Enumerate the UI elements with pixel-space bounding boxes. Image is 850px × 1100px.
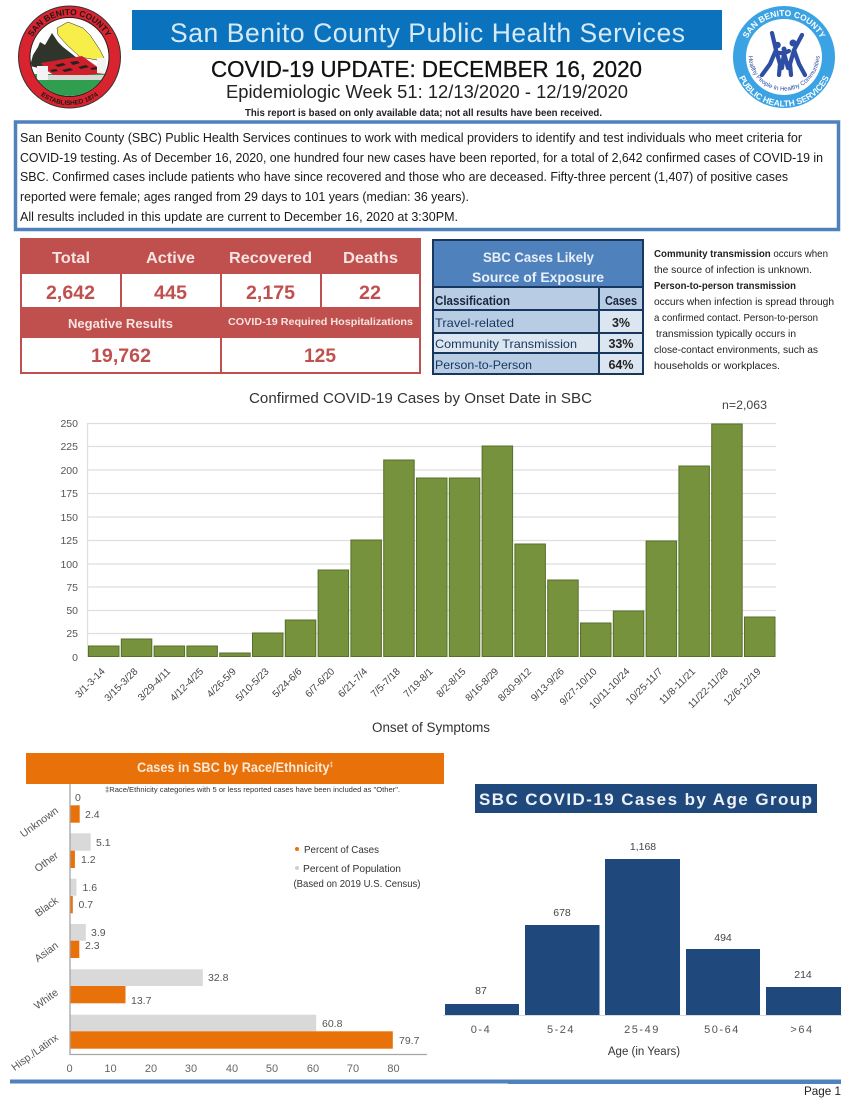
bar chart: age group: 25-49 [624, 1024, 660, 1036]
panel: intro text: COVID-19 testing. As of December 16, 2020, one hundred four new cases have been reported, for a total of 2,642 confirmed cases of COVID-19 in [20, 151, 823, 165]
bar chart: race and ethnicity [9, 784, 427, 1075]
text block: transmission definitions [654, 249, 834, 372]
bar chart: cases by onset date: 3/15-3/28 [103, 666, 141, 704]
panel: intro text: SBC. Confirmed cases include patients who have since recovered and those who are deceased. Fifty-three percent (1,407) of positive cases [20, 170, 788, 184]
bar chart: race and ethnicity: 1.2 [81, 854, 96, 866]
text block: transmission definitions: the source of infection is unknown. [654, 265, 812, 276]
bar chart: race and ethnicity: Hisp./Latinx [9, 1031, 61, 1074]
logo: San Benito County seal: ESTABLISHED 1874 [41, 92, 98, 105]
panel header: race and ethnicity: Cases in SBC by Race/Ethnicity [137, 759, 349, 775]
bar chart: cases by onset date: 5/24-6/6 [271, 666, 305, 700]
panel header: age group [475, 784, 817, 813]
bar chart: cases by onset date: 225 [60, 441, 78, 453]
panel: likely source of exposure table: Travel-related [435, 316, 514, 330]
bar chart: cases by onset date: 9/13-9/26 [529, 666, 567, 704]
panel: likely source of exposure table: Person-to-Person [435, 358, 532, 372]
bar chart: race and ethnicity: 79.7 [399, 1035, 420, 1047]
bar chart: race and ethnicity: Asian [32, 940, 61, 965]
bar chart: race and ethnicity: 80 [387, 1063, 400, 1075]
panel: case totals table: 19,762 [91, 346, 151, 367]
panel: likely source of exposure table: Community Transmission [435, 337, 577, 351]
bar chart: race and ethnicity: 40 [226, 1063, 238, 1075]
chart title: cases by onset date: Confirmed COVID-19 Cases by Onset Date in SBC [249, 391, 592, 407]
panel: case totals table: Deaths [343, 250, 398, 267]
panel: likely source of exposure table: Classification [435, 294, 510, 308]
bar chart: cases by onset date: 25 [66, 628, 78, 640]
logo: Public Health Services [733, 6, 835, 108]
bar chart: age group: 1,168 [630, 841, 656, 853]
panel: case totals table: 125 [304, 346, 336, 367]
panel header: race and ethnicity [26, 753, 444, 784]
panel: likely source of exposure table [432, 239, 644, 375]
chart note: sample size: n=2,063 [722, 400, 767, 412]
text block: transmission definitions: households or workplaces. [654, 361, 780, 372]
bar chart: cases by onset date: 4/26-5/9 [205, 666, 239, 700]
bar chart: race and ethnicity: Unknown [18, 805, 61, 840]
panel: likely source of exposure table: SBC Cases Likely [483, 249, 594, 265]
logo: San Benito County seal [18, 6, 121, 108]
logo: Public Health Services: PUBLIC HEALTH SERVICES [739, 75, 828, 107]
bar chart: cases by onset date: 250 [60, 418, 78, 430]
page number: Page 1 [804, 1084, 841, 1098]
panel: likely source of exposure table: Source of Exposure [472, 269, 604, 285]
axis title: onset of symptoms: Onset of Symptoms [372, 720, 490, 735]
bar chart: cases by onset date: 100 [60, 559, 78, 571]
bar chart: cases by onset date: 9/27-10/10 [558, 666, 600, 708]
panel: case totals table: 445 [154, 283, 187, 304]
logo: Public Health Services: SAN BENITO COUNTY [743, 10, 826, 38]
bar chart: cases by onset date: 3/1-3-14 [74, 666, 108, 700]
bar chart: race and ethnicity: 2.3 [85, 940, 100, 952]
bar chart: race and ethnicity: 0 [66, 1063, 73, 1075]
bar chart: cases by onset date: 4/12-4/25 [168, 666, 206, 704]
bar chart: cases by onset date: 11/22-11/28 [686, 666, 731, 711]
bar chart: cases by onset date: 7/19-8/1 [402, 666, 436, 700]
panel: case totals table: 2,175 [246, 283, 295, 304]
heading: epidemiologic week: Epidemiologic Week 51: 12/13/2020 - 12/19/2020 [226, 81, 628, 102]
bar chart: age group [443, 841, 842, 1036]
logo: San Benito County seal: SAN BENITO COUNTY [28, 9, 112, 36]
panel: case totals table: 2,642 [46, 283, 95, 304]
bar chart: cases by onset date: 200 [60, 465, 78, 477]
panel: intro text [16, 122, 838, 230]
bar chart: cases by onset date: 12/6-12/19 [722, 666, 764, 708]
bar chart: cases by onset date: 6/7-6/20 [303, 666, 338, 700]
bar chart: age group: >64 [790, 1024, 814, 1036]
text block: transmission definitions: transmission typically occurs in [656, 329, 796, 340]
panel: likely source of exposure table: 33% [608, 337, 634, 351]
panel header: race and ethnicity: ‡ [329, 762, 333, 769]
bar chart: race and ethnicity: 30 [185, 1063, 197, 1075]
bar chart: race and ethnicity: 60 [307, 1063, 319, 1075]
bar chart: race and ethnicity: 70 [347, 1063, 359, 1075]
legend: race chart: Percent of Population [303, 864, 401, 875]
bar chart: cases by onset date: 150 [60, 512, 78, 524]
bar chart: cases by onset date: 11/8-11/21 [657, 666, 698, 707]
bar chart: race and ethnicity: 10 [104, 1063, 117, 1075]
footer rule [10, 1080, 841, 1084]
bar chart: cases by onset date: 8/30-9/12 [496, 666, 534, 704]
bar chart: cases by onset date: 10/25-11/7 [624, 666, 666, 707]
bar chart: cases by onset date: 5/10-5/23 [234, 666, 272, 704]
bar chart: cases by onset date: 6/21-7/4 [336, 666, 370, 700]
bar chart: race and ethnicity: 50 [266, 1063, 278, 1075]
bar chart: cases by onset date: 8/2-8/15 [435, 666, 469, 700]
panel: likely source of exposure table: 64% [608, 358, 634, 372]
bar chart: race and ethnicity: 1.6 [82, 882, 97, 894]
text block: transmission definitions: a confirmed contact. Person-to-person [654, 313, 818, 324]
bar chart: race and ethnicity: 13.7 [131, 995, 152, 1007]
bar chart: cases by onset date: 7/5-7/18 [369, 666, 403, 700]
bar chart: race and ethnicity: 2.4 [85, 809, 100, 821]
bar chart: cases by onset date [60, 418, 776, 711]
bar chart: cases by onset date: 10/11-10/24 [587, 666, 633, 711]
bar chart: race and ethnicity: 0 [75, 792, 81, 804]
bar chart: race and ethnicity: 3.9 [91, 927, 106, 939]
bar chart: race and ethnicity: Black [33, 894, 61, 920]
bar chart: age group: 0-4 [471, 1024, 491, 1036]
report note: This report is based on only available data; not all results have been received. [245, 108, 602, 119]
panel: case totals table: Negative Results [68, 317, 173, 331]
panel: likely source of exposure table: 3% [612, 316, 630, 330]
axis title: age in years: Age (in Years) [608, 1046, 680, 1058]
panel: case totals table: COVID-19 Required Hospitalizations [228, 316, 413, 328]
bar chart: cases by onset date: 0 [72, 652, 78, 664]
bar chart: race and ethnicity: 32.8 [208, 972, 229, 984]
title banner: San Benito County Public Health Services [170, 18, 685, 48]
panel header: age group: SBC COVID-19 Cases by Age Group [479, 790, 812, 809]
panel: case totals table: 22 [359, 283, 381, 304]
legend: race chart [294, 845, 420, 890]
title banner [132, 10, 722, 50]
bar chart: age group: 87 [475, 985, 487, 997]
panel: case totals table: Active [146, 250, 195, 267]
bar chart: race and ethnicity: 5.1 [96, 837, 111, 849]
bar chart: race and ethnicity: 0.7 [78, 899, 93, 911]
legend: race chart: Percent of Cases [304, 845, 379, 856]
text block: transmission definitions: Community transmission occurs when [654, 249, 828, 260]
bar chart: cases by onset date: 50 [66, 605, 78, 617]
bar chart: cases by onset date: 8/16-8/29 [464, 666, 502, 704]
bar chart: cases by onset date: 175 [60, 488, 78, 500]
panel: case totals table [20, 238, 421, 374]
logo: Public Health Services: Healthy People In Healthy Communities [748, 56, 820, 91]
text block: transmission definitions: close-contact environments, such as [654, 345, 818, 356]
text block: transmission definitions: Person-to-person transmission [654, 281, 796, 292]
bar chart: cases by onset date: 125 [60, 535, 78, 547]
panel: case totals table: Total [52, 250, 90, 267]
panel: case totals table: Recovered [229, 250, 312, 267]
bar chart: race and ethnicity: White [32, 987, 61, 1012]
bar chart: age group: 214 [794, 969, 812, 981]
heading: update date: COVID-19 UPDATE: DECEMBER 16, 2020 [211, 56, 642, 82]
panel: intro text: All results included in this update are current to December 16, 2020 at 3:30PM. [20, 210, 458, 224]
bar chart: race and ethnicity: Other [32, 849, 61, 875]
bar chart: age group: 50-64 [704, 1024, 740, 1036]
panel: likely source of exposure table: Cases [605, 294, 637, 308]
panel: intro text: reported were female; ages ranged from 29 days to 101 years (median: 36 years). [20, 190, 469, 204]
text block: transmission definitions: occurs when infection is spread through [654, 297, 834, 308]
legend: race chart: (Based on 2019 U.S. Census) [294, 879, 420, 890]
footnote: race categories: ‡Race/Ethnicity categories with 5 or less reported cases have been included as "Other". [105, 785, 400, 794]
bar chart: cases by onset date: 3/29-4/11 [136, 666, 174, 703]
bar chart: age group: 678 [553, 907, 571, 919]
bar chart: race and ethnicity: 20 [145, 1063, 157, 1075]
bar chart: age group: 494 [714, 932, 732, 944]
bar chart: cases by onset date: 75 [66, 582, 78, 594]
bar chart: race and ethnicity: 60.8 [322, 1018, 343, 1030]
bar chart: age group: 5-24 [547, 1024, 575, 1036]
panel: intro text: San Benito County (SBC) Public Health Services continues to work with medical providers to identify and test individuals who meet criteria for [20, 131, 802, 145]
